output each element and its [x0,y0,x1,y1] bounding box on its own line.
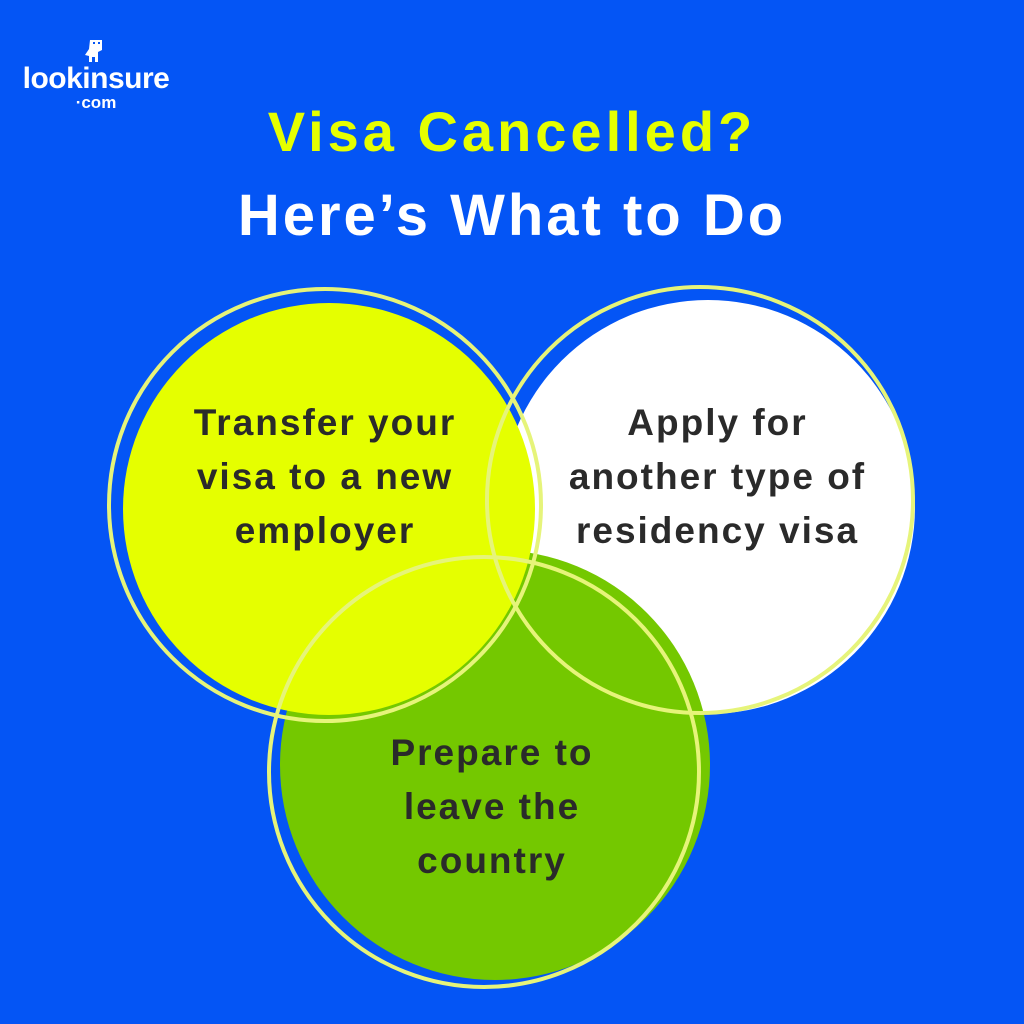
text: transfer visa: Transfer your [194,402,456,443]
icon: dino mascot [85,40,102,62]
logo: ·com [76,93,116,112]
text: apply residency: another type of [569,456,866,497]
text: apply residency: residency visa [576,510,859,551]
text: prepare to leave: Prepare to [390,732,594,773]
circle: green [280,550,710,980]
logo [23,40,169,112]
text: prepare to leave: leave the [404,786,580,827]
text: apply residency [569,402,866,551]
text: transfer visa: visa to a new [197,456,453,497]
title: Visa Cancelled? [268,100,756,163]
rings [109,287,913,987]
subtitle: Here’s What to Do [238,183,786,248]
text: transfer visa [194,402,456,551]
circle: white [501,300,915,714]
circle: yellow [123,303,535,715]
text: prepare to leave [390,732,594,881]
text: transfer visa: employer [235,510,415,551]
text: prepare to leave: country [417,840,567,881]
text: apply residency: Apply for [627,402,808,443]
logo: lookinsure [23,62,169,95]
